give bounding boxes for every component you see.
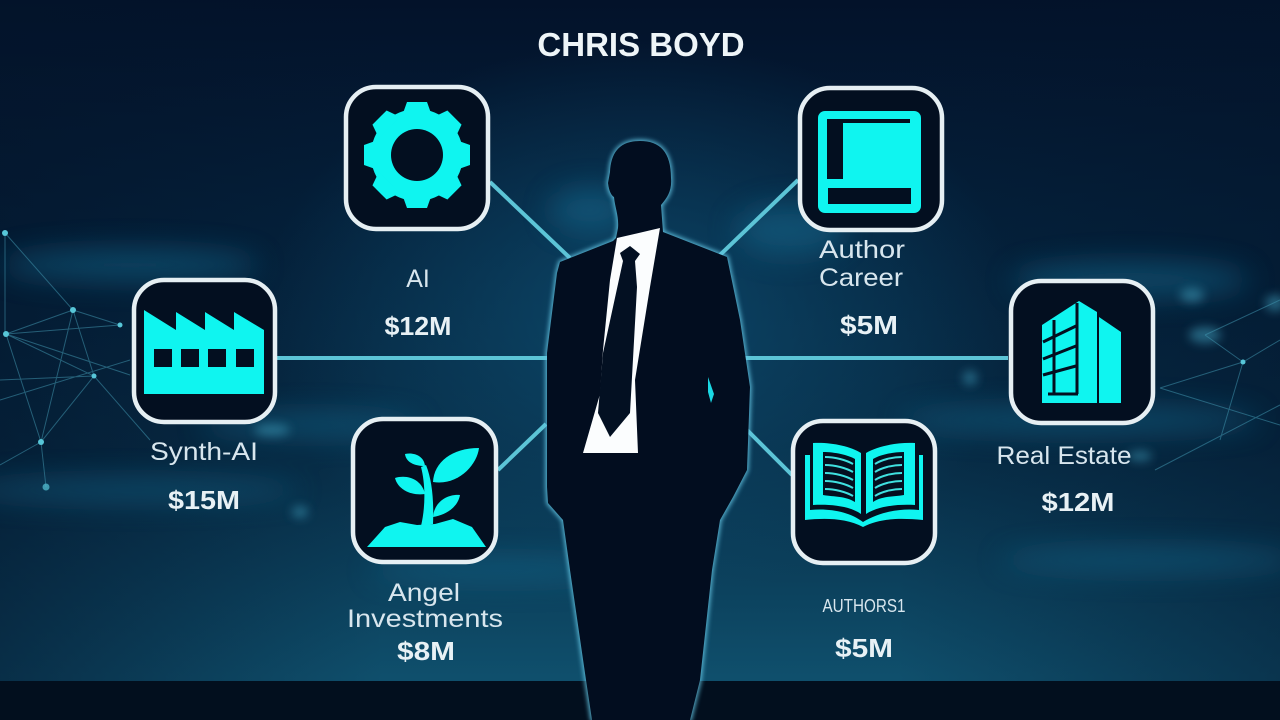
- value: $5M: [840, 310, 898, 340]
- icon: building: [1011, 281, 1153, 423]
- title: CHRIS BOYD: [537, 26, 745, 63]
- value: $15M: [168, 485, 240, 515]
- value: $5M: [835, 633, 893, 663]
- label: Angel: [388, 579, 460, 607]
- icon: book cover: [800, 88, 942, 230]
- shirt: [583, 228, 660, 453]
- connector lines: [277, 180, 1008, 475]
- value: $12M: [384, 311, 452, 341]
- card: AI: [346, 87, 488, 341]
- icon: factory: [134, 280, 275, 422]
- label: Author: [819, 236, 905, 264]
- value: $12M: [1042, 487, 1114, 517]
- label: AI: [406, 265, 430, 293]
- network: left: [0, 230, 150, 490]
- bottom band: [0, 681, 1280, 720]
- card: Author Career: [800, 88, 942, 340]
- label: AUTHORS1: [822, 596, 906, 616]
- card: Author Career: Career: [819, 264, 903, 292]
- card: Synth-AI: [134, 280, 275, 515]
- tie: [598, 246, 640, 437]
- network: right: [1155, 300, 1280, 470]
- icon: open book: [793, 421, 935, 563]
- pocket highlight: [708, 377, 714, 403]
- silhouette figure: [547, 141, 750, 720]
- card: Authors: [793, 421, 935, 663]
- icon: plant: [353, 419, 496, 562]
- card: Real Estate: [996, 281, 1153, 517]
- icon: gear: [346, 87, 488, 229]
- card: Angel Investments: Investments: [347, 605, 503, 633]
- value: $8M: [397, 636, 455, 666]
- label: Synth-AI: [150, 438, 258, 466]
- card: Angel Investments: [347, 419, 503, 666]
- label: Real Estate: [996, 442, 1132, 470]
